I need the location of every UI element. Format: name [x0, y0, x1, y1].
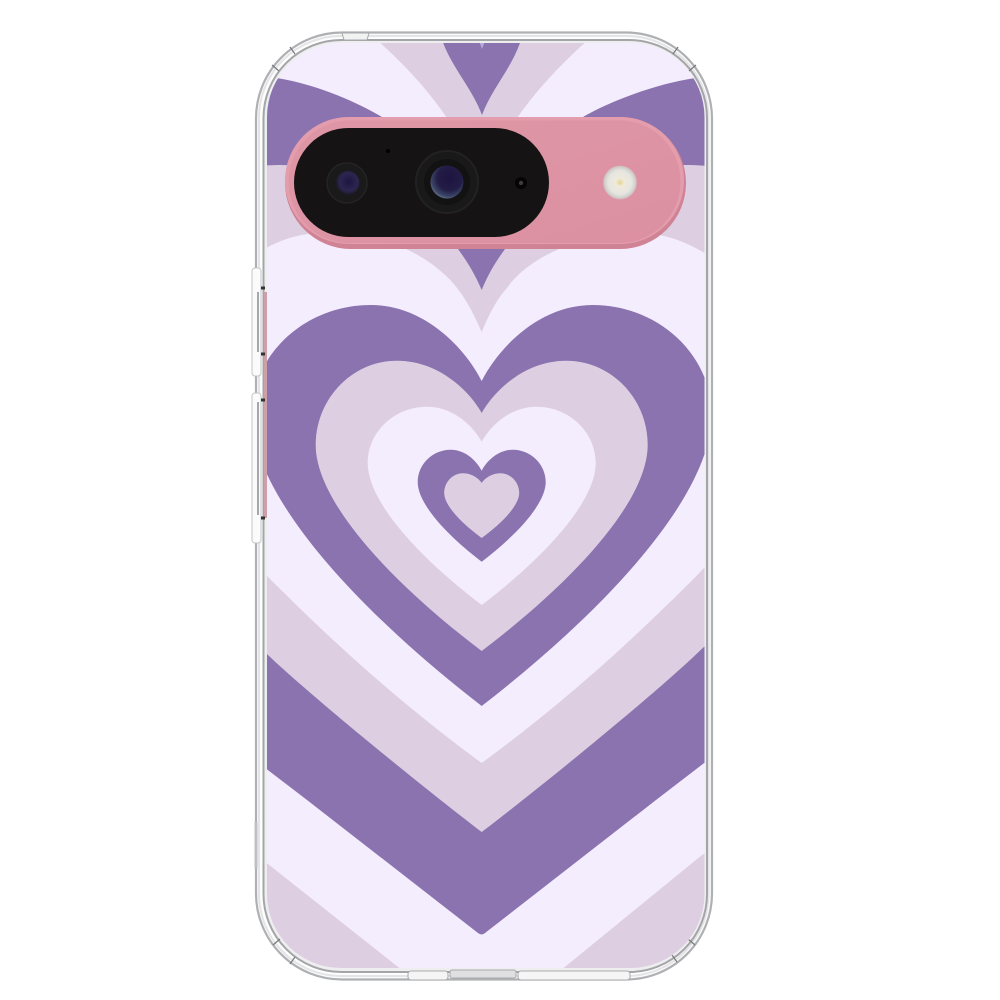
central nested hearts — [252, 305, 712, 706]
small lens — [327, 163, 367, 203]
heart pattern back panel — [267, 43, 704, 968]
small tick at top centre — [480, 43, 484, 49]
heart: small dark — [418, 450, 546, 562]
pink housing face — [288, 120, 680, 243]
top dark chevron — [442, 40, 521, 115]
phone case illustration — [252, 31, 714, 981]
bottom corner light bands — [260, 851, 710, 970]
cream heart ring — [267, 234, 704, 763]
light top rim — [285, 117, 684, 244]
side buttons on case — [252, 268, 265, 543]
heart: cream — [368, 407, 596, 605]
pink phone edge visible at left — [264, 292, 268, 518]
top case notch — [342, 33, 369, 40]
sensor — [515, 177, 527, 189]
heart: dark outer — [252, 305, 712, 706]
background cream — [260, 40, 710, 975]
volume button — [252, 393, 261, 543]
light heart ring — [267, 165, 704, 832]
flash — [603, 166, 637, 200]
top light chevron — [380, 43, 584, 117]
main lens — [416, 151, 478, 213]
large dark heart ring — [267, 78, 704, 934]
heart: light — [316, 361, 648, 651]
camera bar — [285, 117, 686, 249]
lower left side cutout — [254, 822, 258, 868]
pink camera housing rim — [285, 117, 686, 249]
bottom case port details — [408, 970, 630, 980]
power button — [252, 268, 261, 376]
heart: centre light — [444, 473, 519, 538]
black camera window — [294, 128, 549, 237]
clear case shell — [256, 32, 712, 980]
microphone dot — [386, 149, 390, 153]
